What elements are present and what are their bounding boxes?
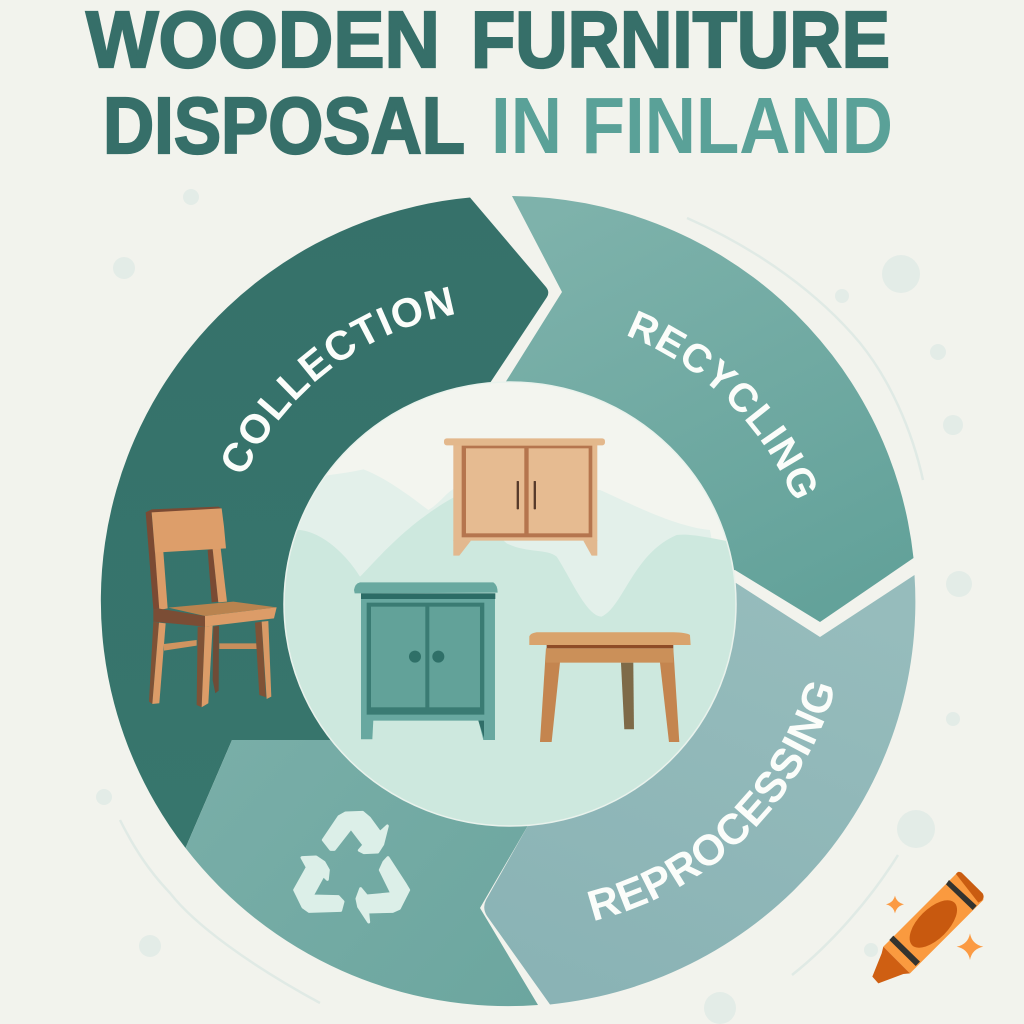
furniture group bbox=[354, 438, 691, 742]
icon: light wooden cabinet bbox=[444, 438, 605, 556]
segment: reprocessing: REPROCESSING bbox=[588, 682, 833, 921]
segment: recycling: RECYCLING bbox=[628, 310, 816, 498]
icon: recycling arrows bbox=[295, 812, 409, 922]
icon: wooden table bbox=[529, 632, 691, 742]
segment: collection bbox=[100, 198, 548, 848]
title: DISPOSAL bbox=[103, 81, 465, 170]
segment: recycling bbox=[506, 196, 914, 622]
title bbox=[86, 0, 893, 170]
segment: collection: COLLECTION bbox=[223, 286, 454, 472]
segment: recycle symbol bbox=[186, 604, 538, 1006]
title: IN FINLAND bbox=[491, 81, 893, 170]
icon: orange crayon with sparkles bbox=[872, 872, 984, 983]
segment: reprocessing bbox=[484, 575, 916, 1004]
icon: chair bbox=[146, 507, 277, 707]
cycle diagram bbox=[100, 196, 916, 1006]
center circle bbox=[283, 381, 737, 827]
icon: teal cabinet bbox=[354, 582, 498, 740]
